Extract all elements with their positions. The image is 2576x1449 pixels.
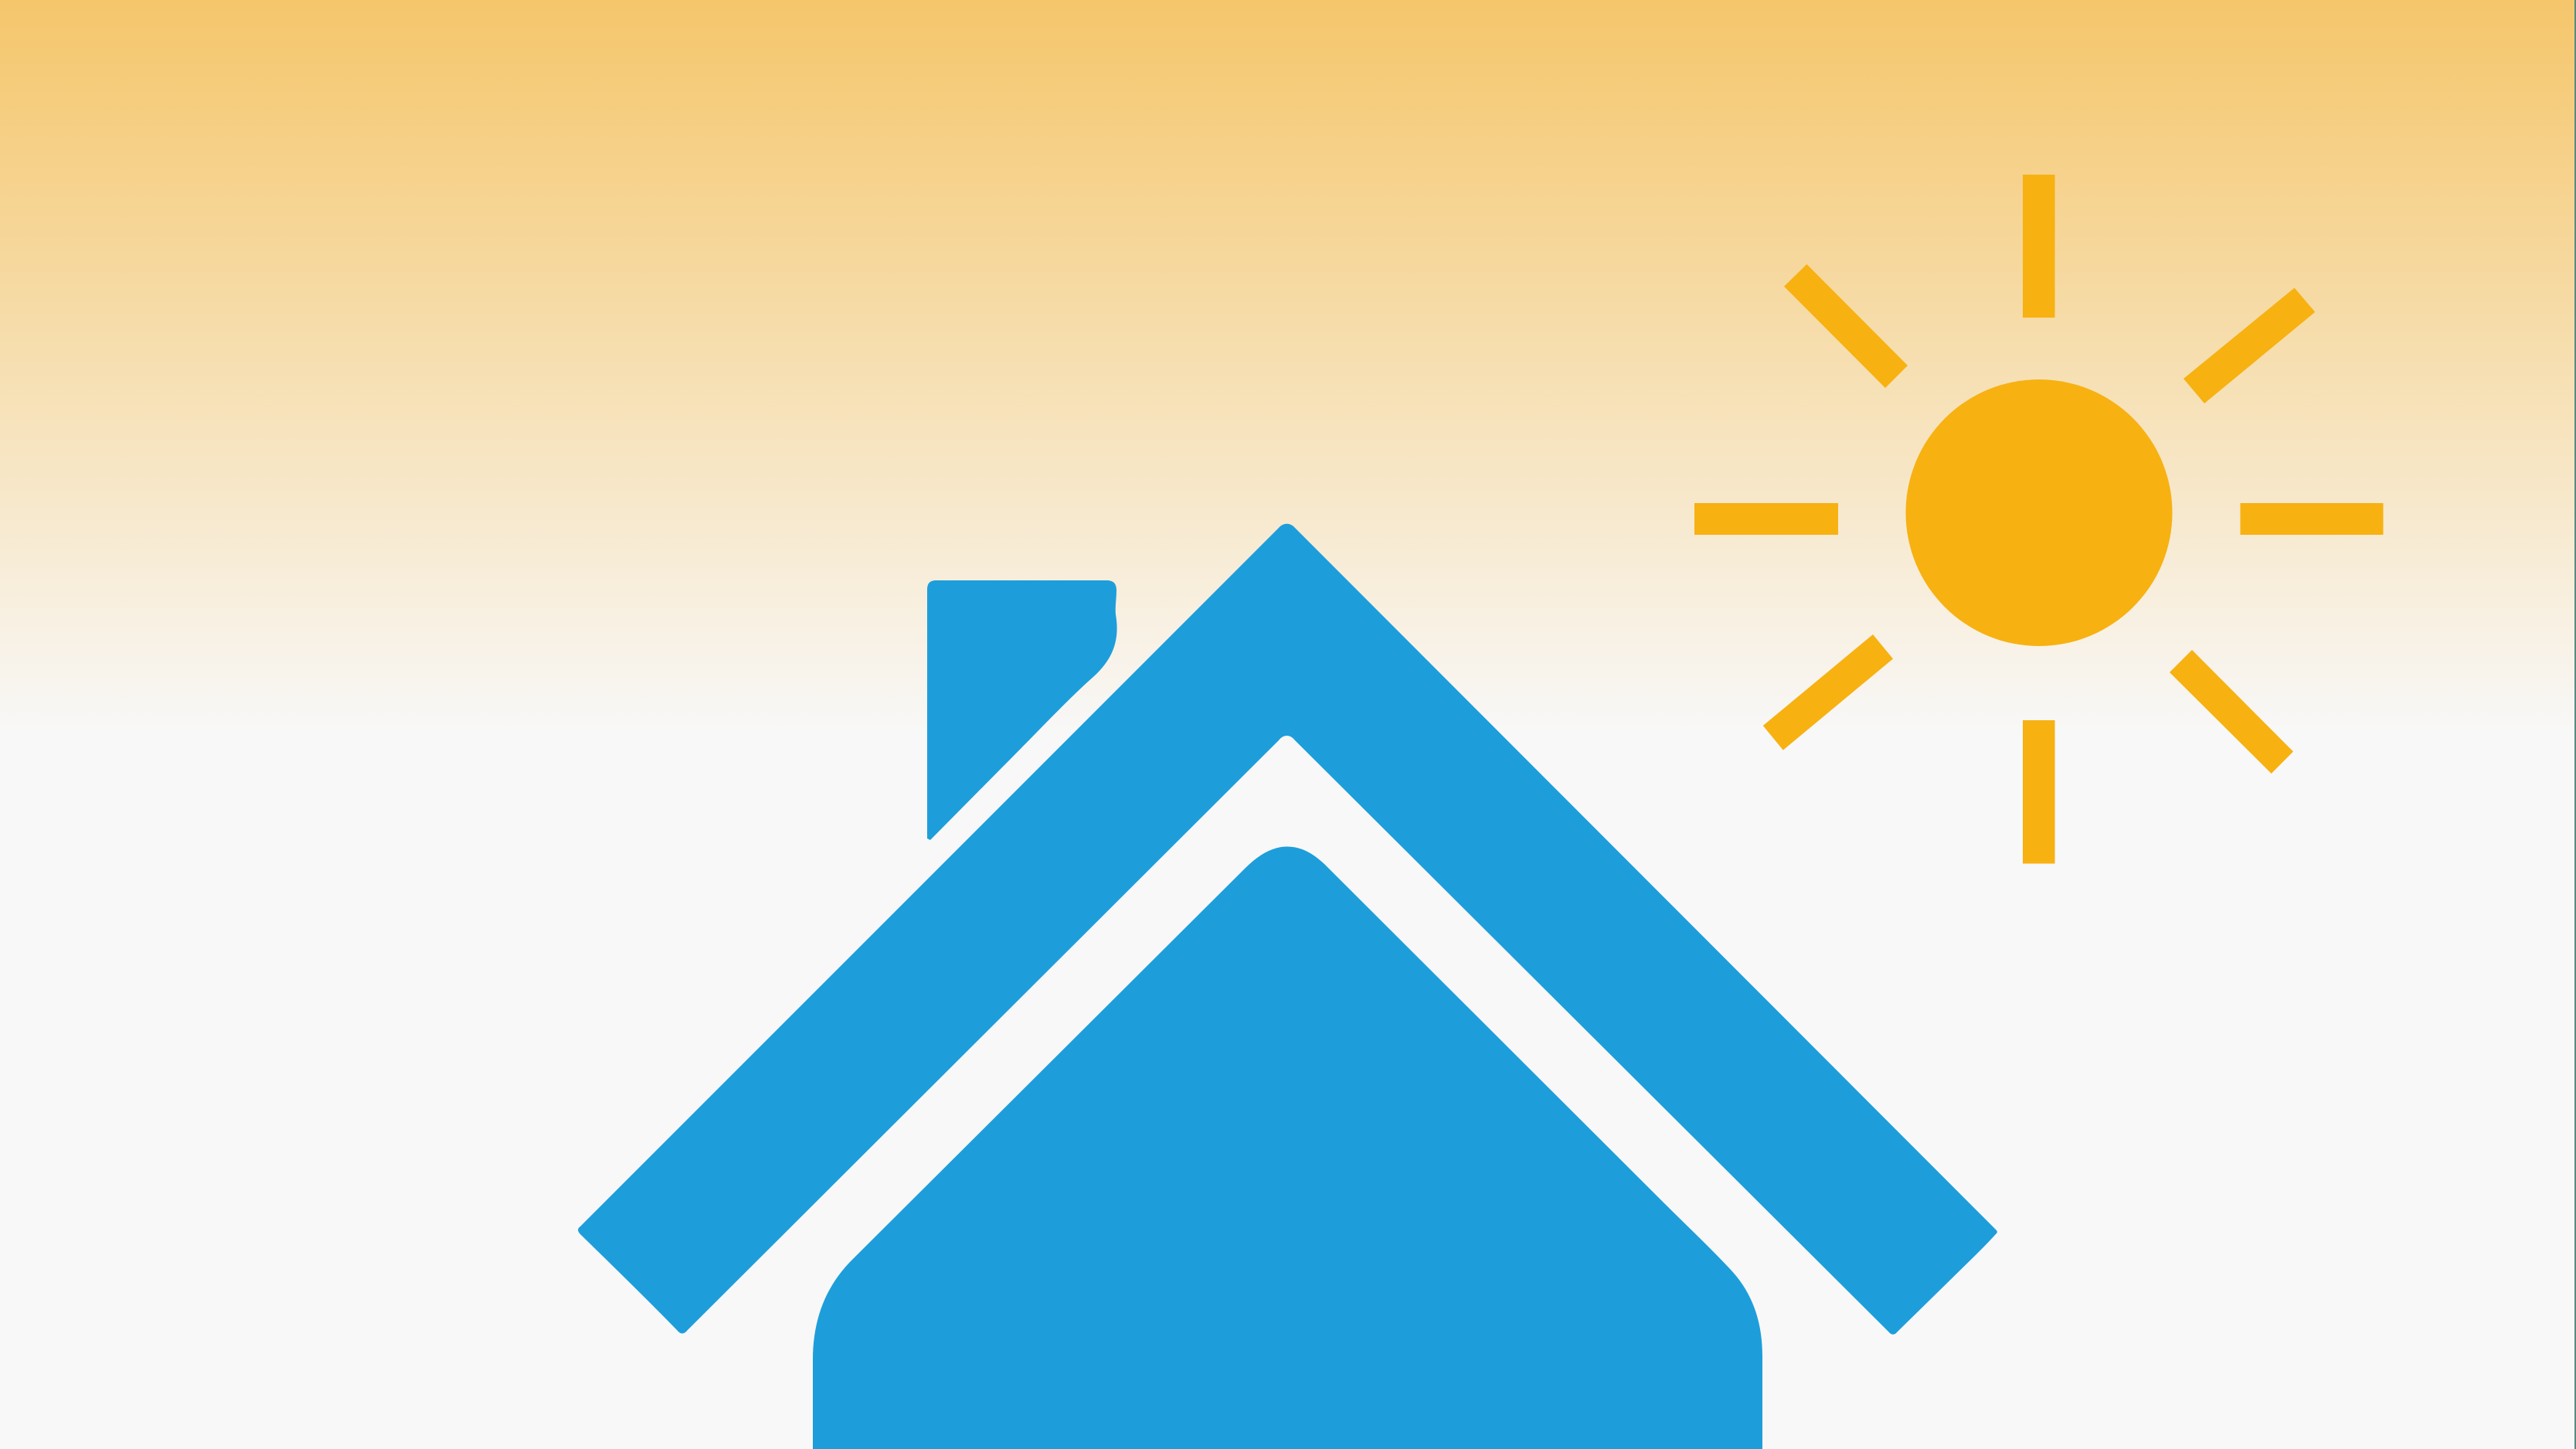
sun ray: bottom left — [1763, 634, 1893, 750]
house chimney — [927, 580, 1117, 840]
icon: house — [578, 524, 1997, 1449]
sun ray: bottom right — [2170, 650, 2293, 774]
sun disc — [1905, 379, 2173, 646]
right edge line — [2574, 0, 2576, 1449]
sun ray: top left — [1784, 264, 1908, 388]
sun ray: top — [2023, 175, 2055, 318]
house roof — [578, 524, 1997, 1335]
icon: sun — [1694, 175, 2383, 864]
sun ray: right — [2241, 503, 2383, 535]
sun ray: left — [1694, 503, 1838, 535]
sun ray: bottom — [2023, 720, 2055, 864]
house body — [813, 847, 1762, 1449]
sun ray: top right — [2183, 287, 2315, 403]
